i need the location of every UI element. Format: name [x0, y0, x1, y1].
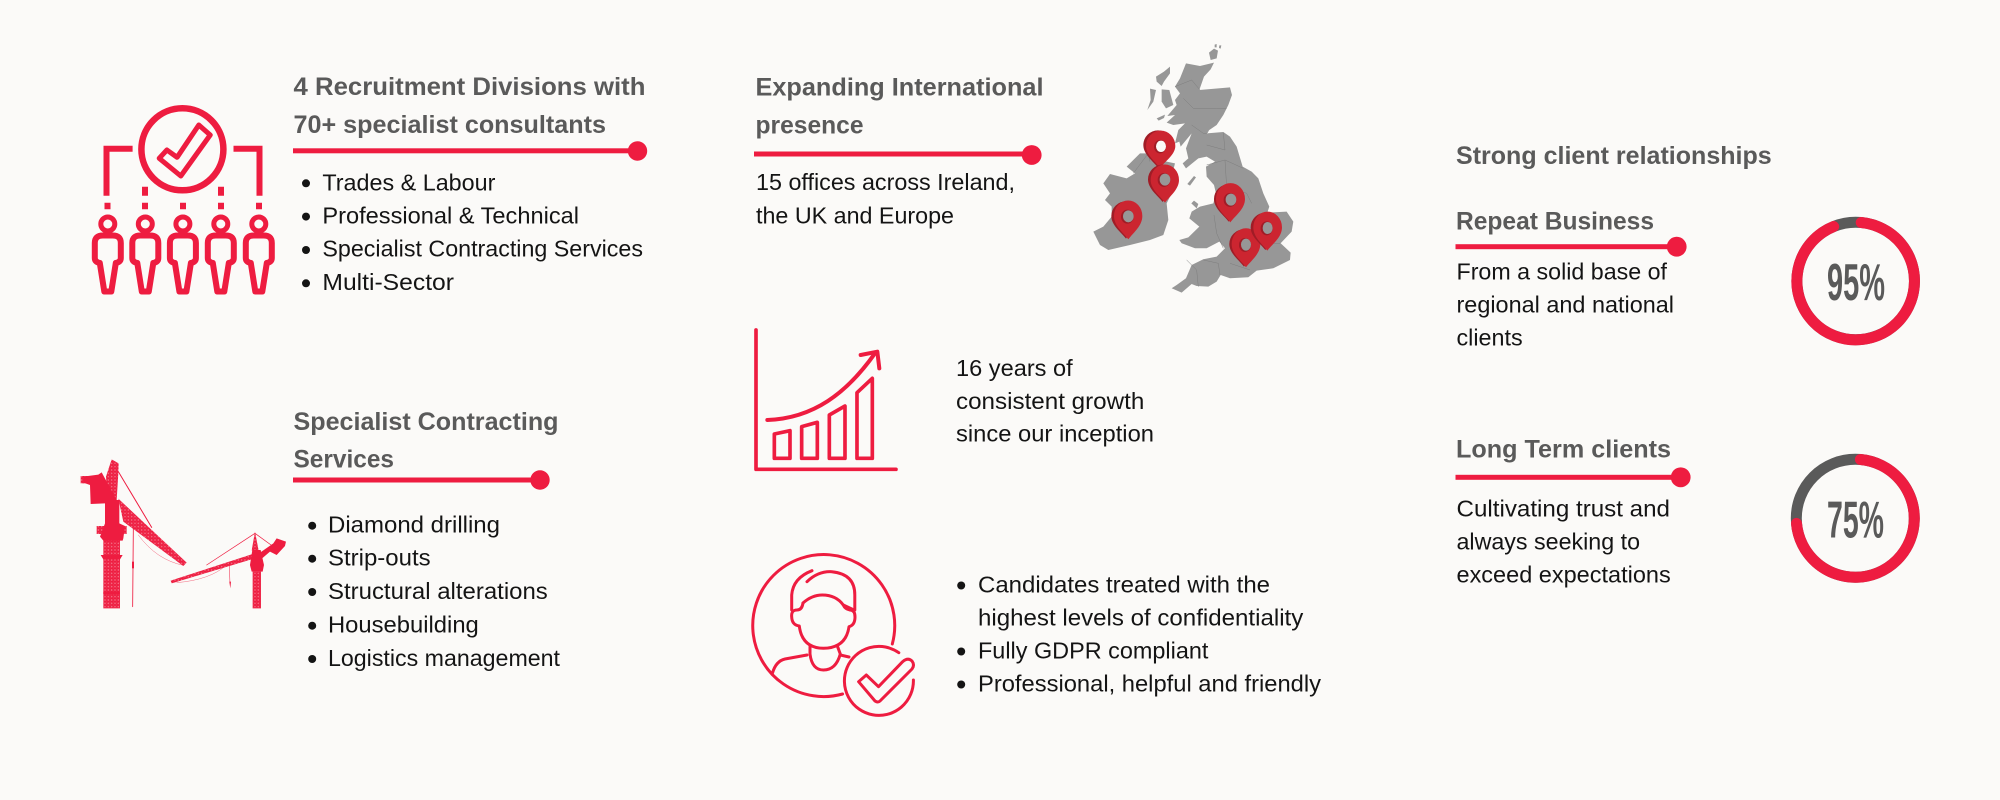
- heading rule with dot: [1456, 467, 1691, 487]
- pin: midlands: [1214, 183, 1245, 222]
- list: contracting services: Housebuilding: [328, 612, 479, 638]
- text: repeat business description: clients: [1456, 325, 1523, 351]
- list: candidate commitments: [957, 572, 1322, 697]
- donut chart: 95%: [1797, 222, 1914, 340]
- heading: expanding international presence: Expanding International: [756, 74, 1044, 102]
- donut chart: 75%: 75%: [1827, 491, 1884, 549]
- text: long term clients description: Cultivating trust and: [1456, 496, 1670, 522]
- map: UK and Ireland with location pins: [1093, 44, 1293, 293]
- text: 16 years of growth: consistent growth: [956, 388, 1144, 414]
- icon: team with checkmark: [95, 108, 272, 292]
- heading: 4 recruitment divisions: [294, 73, 646, 139]
- heading: 4 recruitment divisions: 70+ specialist consultants: [294, 111, 606, 139]
- donut chart: 95%: 95%: [1827, 254, 1885, 312]
- pin: dublin: [1148, 164, 1179, 203]
- text: 16 years of growth: since our inception: [956, 421, 1154, 447]
- list: candidate commitments: Candidates treated with the: [978, 572, 1270, 598]
- icon: rising bar chart: [756, 330, 896, 469]
- list: contracting services: Structural alterations: [328, 578, 548, 604]
- heading: specialist contracting services: [294, 408, 558, 473]
- panel: candidates: [753, 555, 1322, 715]
- pin: south england: [1229, 228, 1260, 267]
- block: repeat business: [1456, 207, 1914, 351]
- heading rule with dot: [754, 145, 1042, 165]
- list: candidate commitments: Fully GDPR compliant: [978, 638, 1209, 664]
- text: offices: [756, 169, 1015, 228]
- pin: london: [1251, 212, 1282, 251]
- list: candidate commitments: Professional, helpful and friendly: [978, 671, 1322, 697]
- panel: specialist contracting services: [81, 408, 561, 671]
- heading: strong client relationships: Strong client relationships: [1456, 142, 1772, 170]
- list: contracting services: Logistics management: [328, 645, 561, 671]
- list: divisions: Specialist Contracting Services: [322, 236, 643, 262]
- text: repeat business description: From a solid base of: [1456, 258, 1668, 284]
- text: long term clients description: [1456, 496, 1671, 588]
- list: divisions: [302, 170, 643, 295]
- text: offices: 15 offices across Ireland,: [756, 169, 1015, 195]
- heading: expanding international presence: [756, 74, 1044, 139]
- panel: recruitment divisions: [95, 73, 647, 295]
- text: 16 years of growth: 16 years of: [956, 355, 1073, 381]
- text: repeat business description: regional and national: [1456, 292, 1674, 318]
- subheading: repeat business: Repeat Business: [1456, 207, 1654, 235]
- pin: northern ireland: [1143, 130, 1175, 168]
- list: divisions: Trades & Labour: [322, 170, 496, 196]
- heading: specialist contracting services: Services: [294, 445, 394, 473]
- list: candidate commitments: highest levels of confidentiality: [978, 605, 1304, 631]
- heading: 4 recruitment divisions: 4 Recruitment Divisions with: [294, 73, 646, 101]
- text: repeat business description: [1456, 258, 1674, 351]
- text: offices: the UK and Europe: [756, 202, 954, 228]
- pin: south west ireland: [1111, 200, 1142, 239]
- block: long term clients: [1456, 435, 1914, 588]
- text: long term clients description: exceed expectations: [1456, 562, 1671, 588]
- heading rule with dot: [293, 141, 647, 161]
- list: contracting services: Diamond drilling: [328, 512, 500, 538]
- subheading: long term clients: Long Term clients: [1456, 435, 1671, 463]
- icon: tower cranes: [81, 459, 286, 608]
- list: divisions: Multi-Sector: [322, 269, 454, 295]
- list: contracting services: Strip-outs: [328, 545, 431, 571]
- heading rule with dot: [1456, 237, 1687, 257]
- panel: consistent growth: [756, 330, 1154, 469]
- heading: specialist contracting services: Specialist Contracting: [294, 408, 558, 436]
- text: long term clients description: always seeking to: [1456, 529, 1640, 555]
- icon: person with verified check: [753, 555, 914, 715]
- donut chart: 75%: [1796, 459, 1914, 577]
- list: divisions: Professional & Technical: [322, 202, 579, 228]
- heading: expanding international presence: presence: [756, 111, 864, 139]
- heading rule with dot: [293, 470, 550, 490]
- panel: strong client relationships: [1456, 142, 1914, 588]
- panel: international presence: [754, 44, 1293, 293]
- list: contracting services: [308, 512, 561, 671]
- text: 16 years of growth: [956, 355, 1154, 447]
